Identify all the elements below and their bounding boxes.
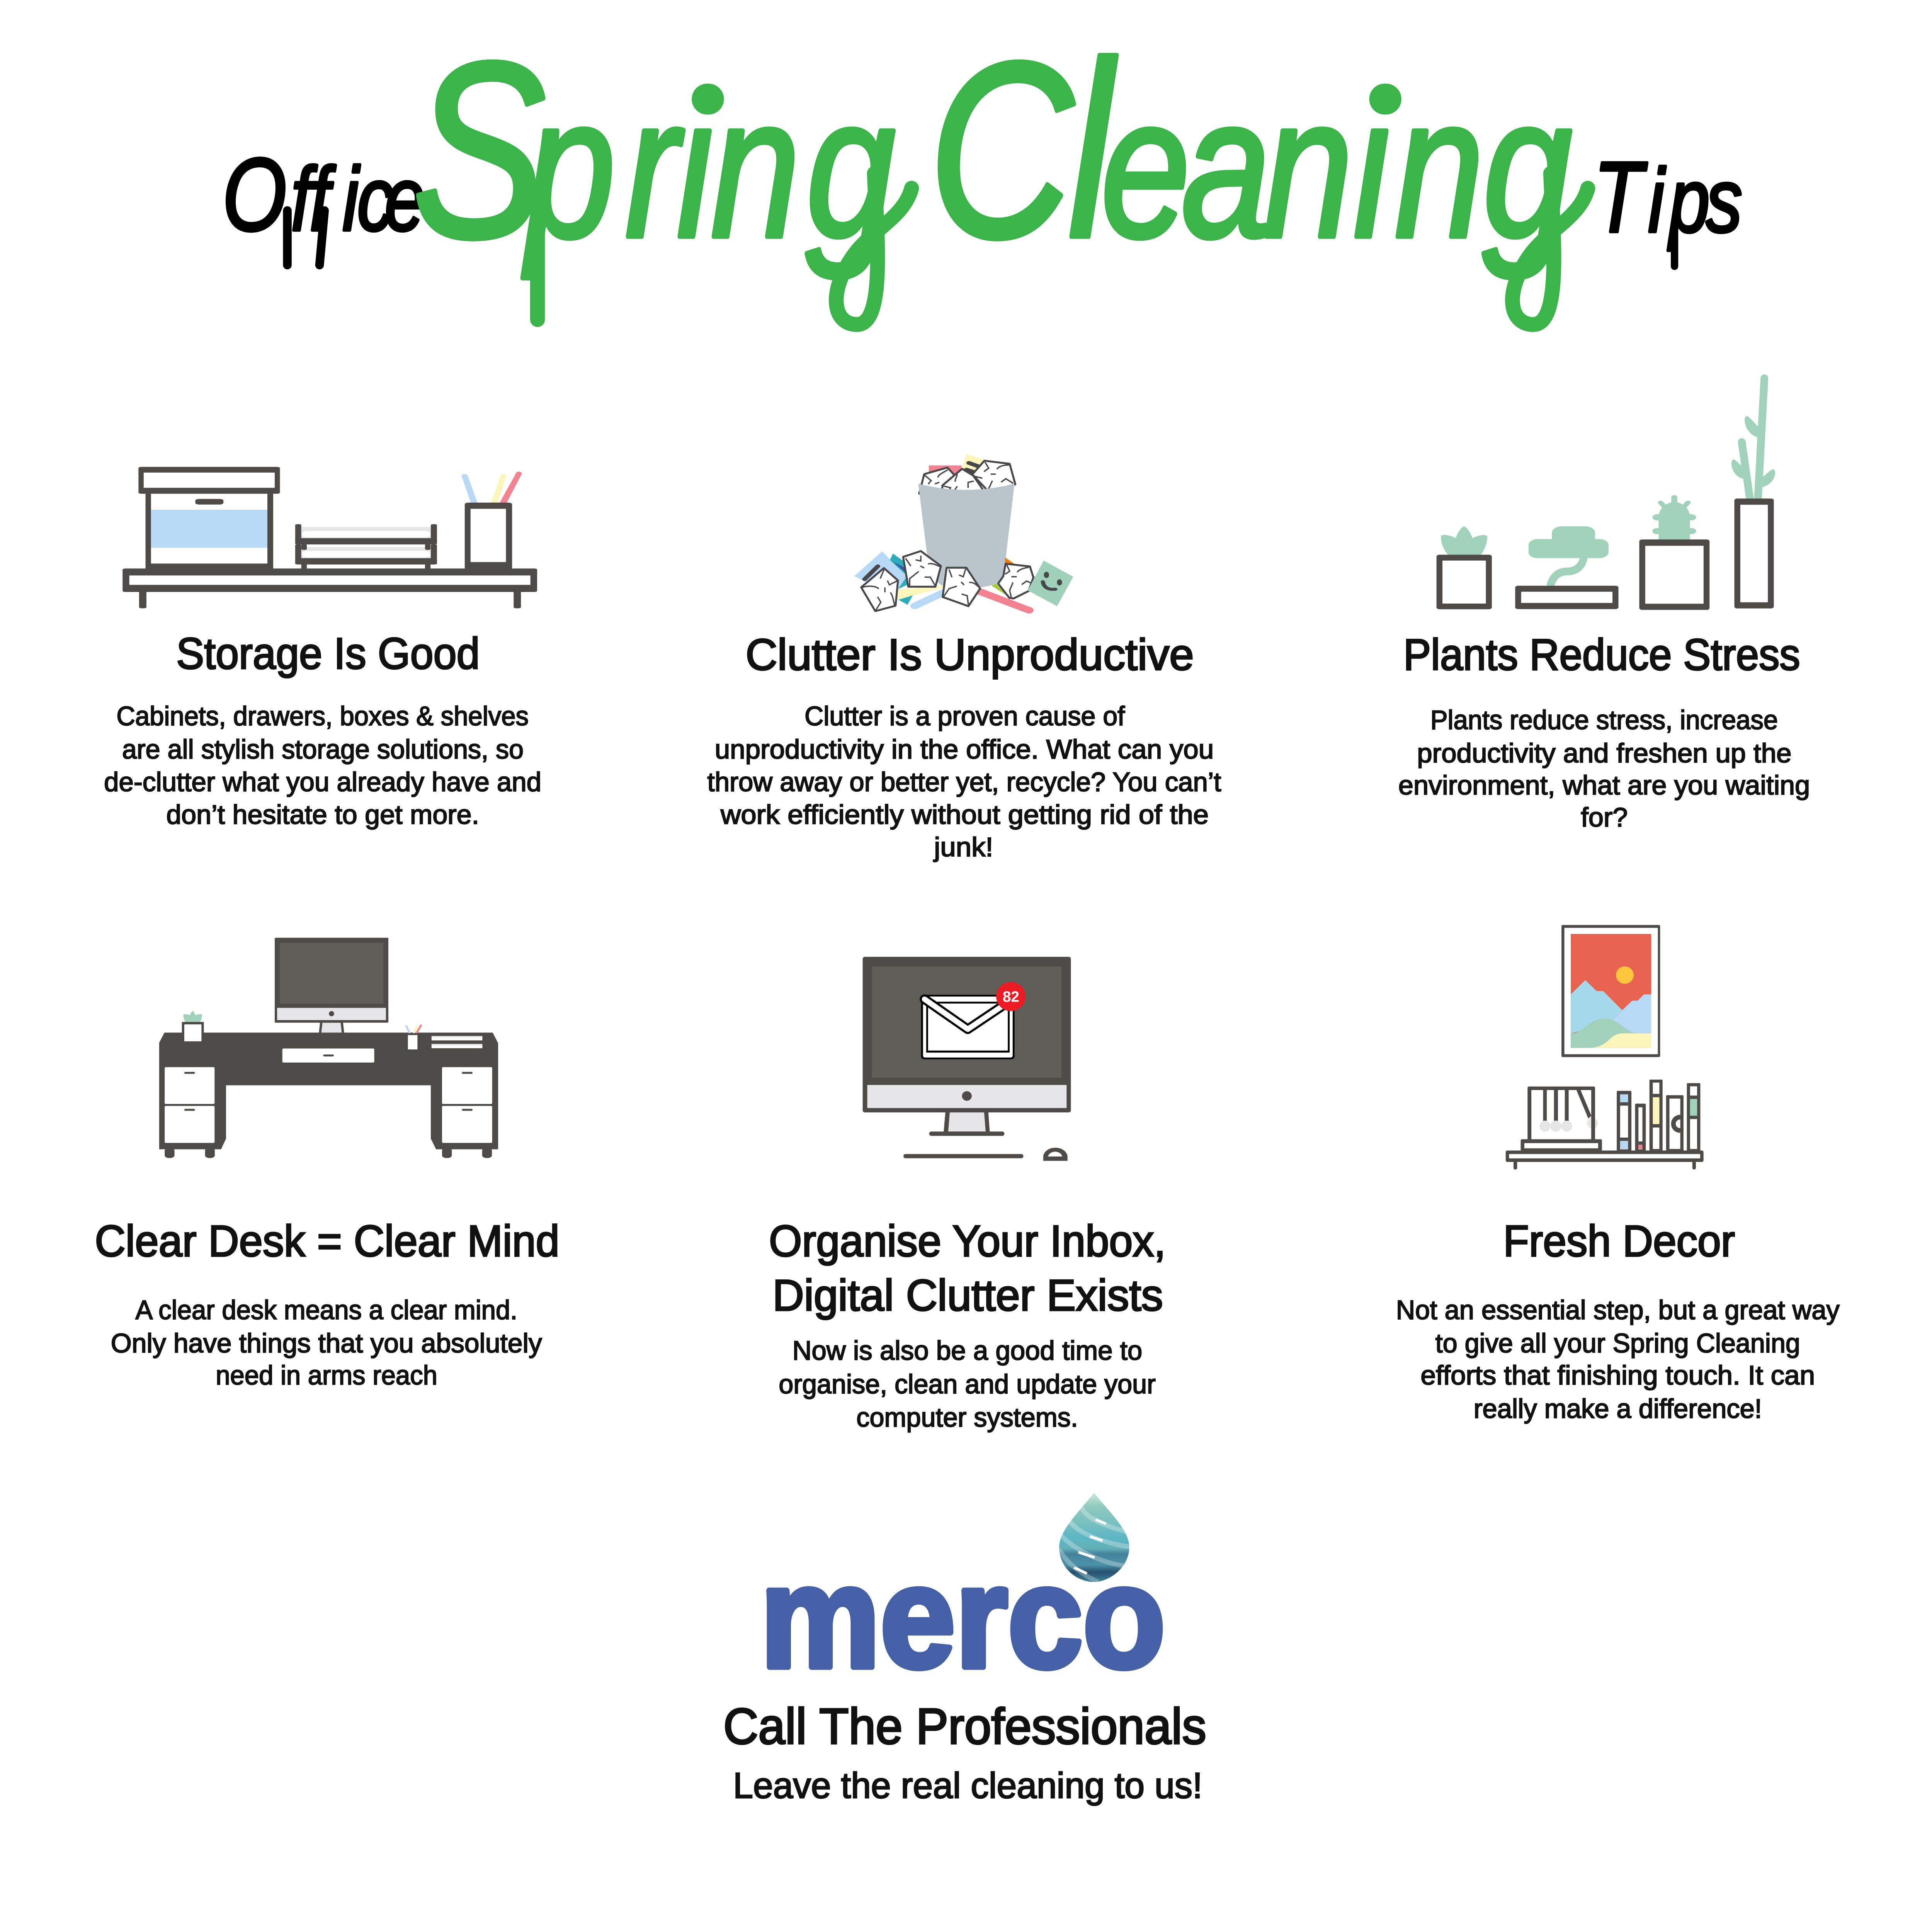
text block: clutter: junk! — [933, 832, 993, 862]
text block: storage: Cabinets, drawers, boxes & shelves — [116, 701, 529, 731]
title word: Tips: T — [1594, 141, 1648, 253]
title words: Spring Cleaning: e — [1101, 56, 1190, 279]
icon: trash bin with crumpled paper — [854, 454, 1073, 611]
text block: decor: to give all your Spring Cleaning — [1435, 1328, 1800, 1358]
keyboard and mouse — [903, 1148, 1068, 1161]
text block: storage: don’t hesitate to get more. — [166, 799, 479, 830]
envelope — [921, 995, 1015, 1059]
title — [222, 10, 1742, 325]
icon: storage shelf — [122, 467, 537, 608]
title words: Spring Cleaning: S — [412, 10, 546, 290]
title words: Spring Cleaning: r — [625, 56, 685, 279]
icon: wall art and bookshelf — [1506, 925, 1704, 1170]
tagline: Leave the real cleaning to us! — [733, 1765, 1202, 1806]
title words: Spring Cleaning: a — [1182, 56, 1270, 279]
title word: Office: f — [291, 148, 318, 250]
shelf — [122, 568, 537, 608]
crumpled paper balls — [861, 551, 1033, 611]
cactus — [1639, 495, 1709, 610]
text block: decor — [1396, 1295, 1840, 1424]
monitor — [863, 957, 1071, 1136]
newton's cradle — [1520, 1087, 1602, 1151]
icon: water drop — [1057, 1492, 1131, 1583]
text block: plants: environment, what are you waiting — [1398, 770, 1810, 800]
title words: Spring Cleaning — [412, 10, 1588, 325]
text block: clear desk: need in arms reach — [216, 1360, 437, 1390]
text block: storage — [104, 701, 541, 830]
title word: Office: e — [385, 148, 425, 250]
bonsai — [1515, 526, 1618, 609]
heading: Fresh Decor: Fresh Decor — [1503, 1217, 1735, 1266]
heading: Clutter Is Unproductive: Clutter Is Unproductive — [745, 630, 1194, 679]
text block: plants: Plants reduce stress, increase — [1430, 705, 1778, 735]
title words: Spring Cleaning: C — [929, 10, 1076, 290]
pen cup — [462, 472, 522, 570]
logo: merco — [766, 1493, 1163, 1672]
title words: Spring Cleaning: n — [711, 56, 800, 279]
title words: Spring Cleaning: i — [677, 56, 717, 279]
text block: decor: Not an essential step, but a great way — [1396, 1295, 1840, 1325]
title word: Office — [222, 137, 425, 265]
text block: storage: are all stylish storage solutions, so — [122, 734, 524, 764]
text block: plants: productivity and freshen up the — [1417, 738, 1792, 768]
title words: Spring Cleaning: l — [1068, 10, 1118, 290]
icon: computer with inbox — [863, 957, 1071, 1161]
text block: clear desk: Only have things that you absolutely — [111, 1328, 542, 1358]
scattered paper left — [854, 551, 944, 606]
text block: inbox: Now is also be a good time to — [793, 1335, 1142, 1366]
title word: Tips — [1594, 141, 1742, 266]
bin — [918, 484, 1014, 589]
shelf — [1506, 1150, 1704, 1170]
desk tray — [432, 1036, 482, 1048]
title words: Spring Cleaning: n — [1264, 56, 1353, 279]
text block: storage: de-clutter what you already have and — [104, 767, 541, 797]
desk drawers — [165, 1049, 492, 1143]
text block: clear desk — [111, 1295, 542, 1390]
desk plant — [182, 1011, 204, 1041]
desk pen cup — [406, 1025, 421, 1049]
heading: Organise Your Inbox: Organise Your Inbox, — [769, 1217, 1166, 1266]
books — [1617, 1080, 1700, 1151]
bamboo — [1731, 378, 1775, 609]
framed picture — [1561, 925, 1660, 1057]
text block: inbox — [779, 1335, 1156, 1432]
heading: Storage Is Good: Storage Is Good — [176, 629, 480, 678]
text block: inbox: computer systems. — [856, 1402, 1078, 1432]
title word: Office: O — [222, 137, 287, 252]
title word: Office: c — [357, 148, 393, 250]
title words: Spring Cleaning: n — [1395, 56, 1484, 279]
title words: Spring Cleaning: p — [521, 56, 615, 280]
heading: Plants Reduce Stress: Plants Reduce Stress — [1403, 630, 1800, 679]
icon: desk with computer — [159, 938, 498, 1158]
papers behind bin — [919, 454, 1015, 493]
title word: Office: f — [310, 148, 336, 250]
desk body — [159, 1032, 498, 1149]
title word: Tips: s — [1706, 150, 1742, 251]
icon: potted plants — [1437, 378, 1775, 610]
title word: Tips: p — [1667, 150, 1710, 251]
storage box — [138, 467, 280, 570]
text block: clutter: work efficiently without getting rid of the — [720, 799, 1209, 830]
text block: clutter: Clutter is a proven cause of — [804, 701, 1125, 731]
text block: clutter — [707, 701, 1221, 862]
heading: Organise Your Inbox: Digital Clutter Exists — [772, 1271, 1163, 1320]
heading: Call The Professionals: Call The Professionals — [723, 1698, 1206, 1755]
monitor — [275, 938, 388, 1033]
title word: Tips: i — [1648, 150, 1666, 251]
badge number: 82 — [1003, 989, 1019, 1005]
desk feet — [165, 1148, 492, 1158]
title words: Spring Cleaning: g — [806, 56, 896, 280]
title words: Spring Cleaning: g — [1483, 56, 1573, 280]
scattered paper right — [980, 558, 1035, 610]
text block: clutter: unproductivity in the office. What can you — [715, 734, 1214, 764]
heading: Clear Desk = Clear Mind: Clear Desk = Clear Mind — [95, 1217, 560, 1266]
text block: clutter: throw away or better yet, recycle? You can’t — [707, 767, 1221, 797]
wordmark: merco — [760, 1537, 1165, 1698]
text block: clear desk: A clear desk means a clear mind. — [135, 1295, 517, 1325]
text block: inbox: organise, clean and update your — [779, 1369, 1156, 1399]
text block: plants: for? — [1581, 802, 1628, 832]
letter trays — [295, 524, 437, 569]
text block: plants — [1398, 705, 1810, 832]
heading: Organise Your Inbox — [769, 1217, 1166, 1320]
title word: Office: i — [342, 148, 360, 250]
smiley note — [1028, 561, 1073, 606]
text block: decor: efforts that finishing touch. It can — [1420, 1360, 1815, 1390]
succulent — [1437, 526, 1492, 609]
text block: decor: really make a difference! — [1474, 1394, 1762, 1424]
title words: Spring Cleaning: i — [1354, 56, 1394, 279]
notification badge circle — [996, 982, 1026, 1011]
